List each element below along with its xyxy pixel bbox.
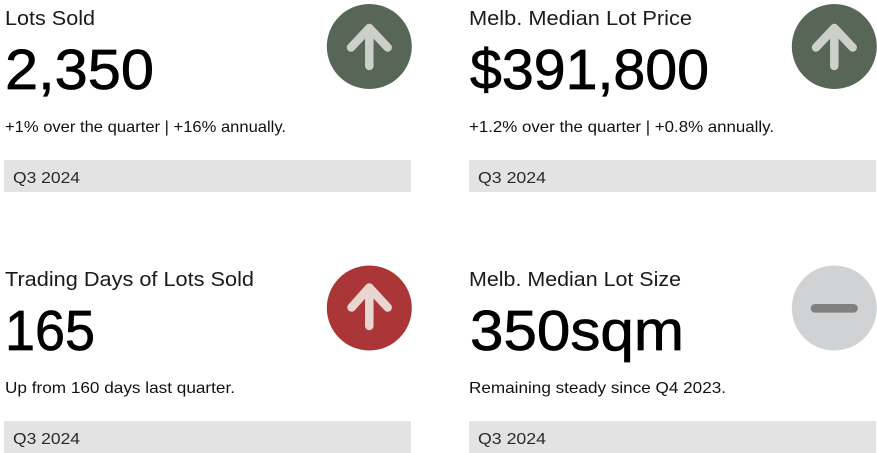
text: lot price change: +1.2% over the quarter | +0.8% annually. (469, 119, 774, 136)
icon: green up arrow (792, 4, 877, 89)
period bar: Q3 2024: Q3 2024 (478, 431, 546, 448)
heading: median lot size: Melb. Median Lot Size (469, 269, 681, 291)
period bar: Q3 2024 (469, 421, 876, 453)
period bar: Q3 2024: Q3 2024 (478, 170, 546, 187)
heading: lots sold: Lots Sold (5, 8, 95, 30)
panel: trading days (4, 266, 412, 453)
number: 165: 165 (5, 299, 95, 363)
period bar: Q3 2024 (469, 160, 876, 192)
panel: lots sold (4, 4, 412, 192)
period bar: Q3 2024 (4, 421, 411, 453)
text: trading days change: Up from 160 days last quarter. (5, 380, 235, 397)
icon: grey dash (792, 266, 877, 350)
heading: trading days: Trading Days of Lots Sold (5, 269, 254, 291)
icon: green up arrow (327, 4, 412, 89)
panel: median lot size (469, 266, 877, 453)
panel: median lot price (469, 4, 877, 192)
heading: median lot price: Melb. Median Lot Price (469, 8, 692, 30)
period bar: Q3 2024 (4, 160, 411, 192)
period bar: Q3 2024: Q3 2024 (13, 431, 80, 448)
icon: red up arrow (327, 266, 412, 350)
text: lots sold change: +1% over the quarter | +16% annually. (5, 119, 286, 136)
period bar: Q3 2024: Q3 2024 (13, 170, 80, 187)
number: $391,800: $391,800 (470, 38, 709, 102)
number: 350sqm: 350sqm (470, 299, 684, 363)
text: lot size note: Remaining steady since Q4 2023. (469, 380, 726, 397)
number: 2,350: 2,350 (5, 38, 154, 102)
